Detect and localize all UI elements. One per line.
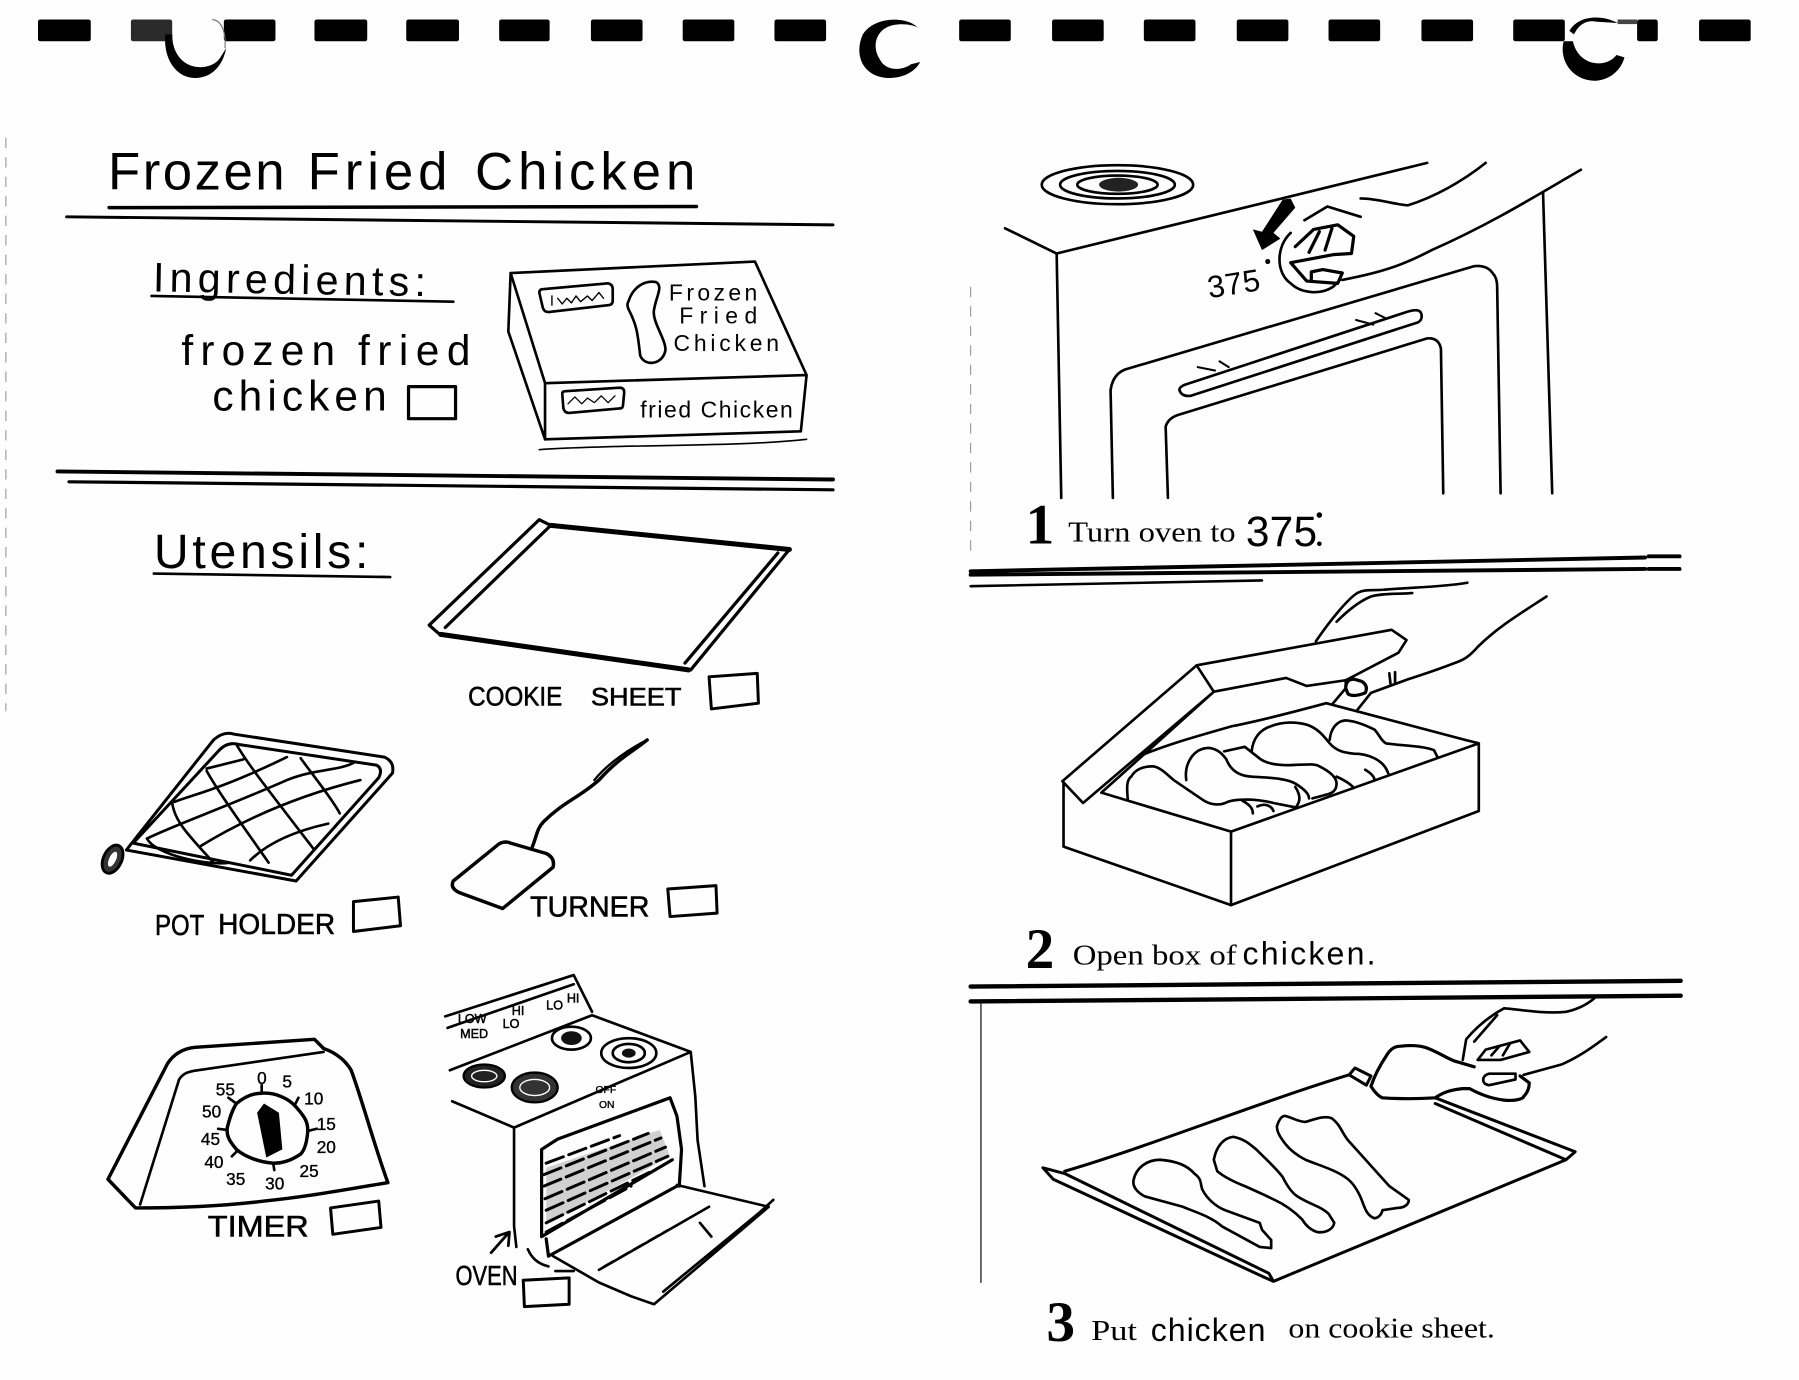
icon: timer: 30 [265,1174,284,1194]
label: cookie sheet [468,681,682,711]
icon: timer: 35 [226,1169,245,1189]
ingredient: frozen fried chicken: chicken [212,373,387,420]
step 1 caption: 375 [1246,508,1317,555]
icon: timer: 5 [282,1071,292,1091]
label: timer: TIMER [208,1211,309,1244]
icon: oven: LOW [458,1012,487,1026]
icon: timer: 55 [216,1080,235,1100]
icon: oven [445,975,773,1304]
ingredient: frozen fried chicken [181,327,470,420]
icon: chicken box: fried Chicken [640,397,793,423]
icon: timer: 25 [300,1161,319,1181]
icon: timer: 15 [317,1114,336,1134]
step 2 caption: chicken. [1242,936,1376,972]
checkbox: turner [668,886,717,917]
step 2 caption [1026,918,1376,981]
title: Fried [308,142,448,201]
ingredient: frozen fried chicken: frozen [181,327,335,374]
faint scan margin marks [6,138,971,711]
step 2 illustration [1062,583,1546,905]
title: Frozen [108,142,285,201]
label: cookie sheet: SHEET [591,683,682,711]
step 1 caption [1026,494,1322,557]
checkbox: oven [523,1278,569,1307]
icon: oven: LO [503,1017,520,1031]
icon: oven: HI [567,992,579,1006]
label: oven [456,1232,518,1291]
step 2 caption: Open box of [1073,940,1237,972]
icon: cookie sheet [429,520,789,670]
label: turner: TURNER [530,892,649,924]
step 3 caption: 3 [1046,1291,1075,1354]
utensils heading: Utensils: [154,525,368,579]
ingredient: frozen fried chicken: fried [358,327,470,374]
step 1 illustration [1005,163,1581,498]
checkbox: timer [331,1201,381,1234]
step 2 caption: 2 [1026,918,1054,981]
step 1 caption: 1 [1026,494,1054,557]
icon: chicken box [508,262,807,450]
title: Chicken [475,142,695,201]
icon: oven: MED [460,1027,488,1041]
step 1 illustration: 375 [1205,262,1262,305]
icon: chicken box: Frozen [669,280,757,306]
title [108,142,695,201]
step 3 caption: chicken [1151,1312,1265,1348]
divider [971,981,1681,1001]
label: cookie sheet: COOKIE [468,681,562,711]
icon: timer: 45 [201,1129,220,1149]
binder punch strip [38,18,1751,81]
icon: timer: 10 [304,1089,323,1109]
icon: chicken box: Fried [679,302,757,328]
step 1 caption: Turn oven to [1068,516,1236,548]
icon: timer: 20 [317,1137,336,1157]
icon: turner [452,740,647,909]
step 3 caption [1046,1291,1495,1354]
icon: timer: 0 [257,1068,267,1088]
label: pot holder: POT [155,910,204,942]
icon: timer [108,1039,388,1208]
label: pot holder: HOLDER [218,909,335,941]
checkbox: cookie sheet [709,673,758,709]
ingredients heading: Ingredients: [153,254,426,305]
icon: pot holder [98,733,393,881]
icon: timer: 40 [204,1152,223,1172]
label: pot holder [155,909,335,942]
checkbox: pot holder [353,897,400,931]
step 3 illustration [1043,997,1606,1281]
divider [971,556,1680,575]
icon: chicken box: Chicken [674,330,779,356]
icon: oven: LO [546,998,563,1012]
icon: oven: HI [512,1004,524,1018]
icon: oven: ON [599,1100,614,1111]
step 3 caption: Put [1091,1315,1137,1347]
icon: oven: OFF [596,1085,616,1096]
icon: timer: 50 [202,1101,221,1121]
step 3 caption: on cookie sheet. [1288,1313,1495,1345]
label: oven: OVEN [456,1260,518,1291]
